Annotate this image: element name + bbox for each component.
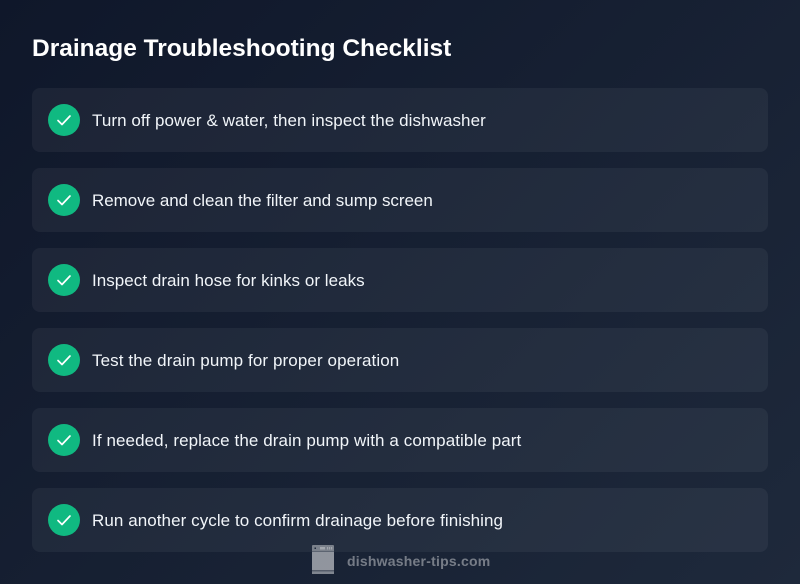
icon: check 4 bbox=[48, 344, 80, 376]
icon: dishwasher bbox=[312, 545, 334, 574]
panel: step 2 bbox=[32, 168, 768, 232]
step 4 text: Test the drain pump for proper operation bbox=[92, 351, 399, 370]
step 2 text: Remove and clean the filter and sump screen bbox=[92, 191, 433, 210]
icon: check 2 bbox=[48, 184, 80, 216]
icon: check 6 bbox=[48, 504, 80, 536]
step 1 text: Turn off power & water, then inspect the dishwasher bbox=[92, 111, 486, 130]
icon: check 5 bbox=[48, 424, 80, 456]
watermark bbox=[312, 545, 490, 574]
panel: step 1 bbox=[32, 88, 768, 152]
icon: check 1 bbox=[48, 104, 80, 136]
panel: step 5 bbox=[32, 408, 768, 472]
panel: step 6 bbox=[32, 488, 768, 552]
icon: check 3 bbox=[48, 264, 80, 296]
panel: step 4 bbox=[32, 328, 768, 392]
watermark text: dishwasher-tips.com bbox=[347, 553, 490, 569]
panel: step 3 bbox=[32, 248, 768, 312]
step 5 text: If needed, replace the drain pump with a compatible part bbox=[92, 431, 521, 450]
step 6 text: Run another cycle to confirm drainage before finishing bbox=[92, 511, 503, 530]
step 3 text: Inspect drain hose for kinks or leaks bbox=[92, 271, 365, 290]
title: Drainage Troubleshooting Checklist bbox=[32, 35, 451, 62]
